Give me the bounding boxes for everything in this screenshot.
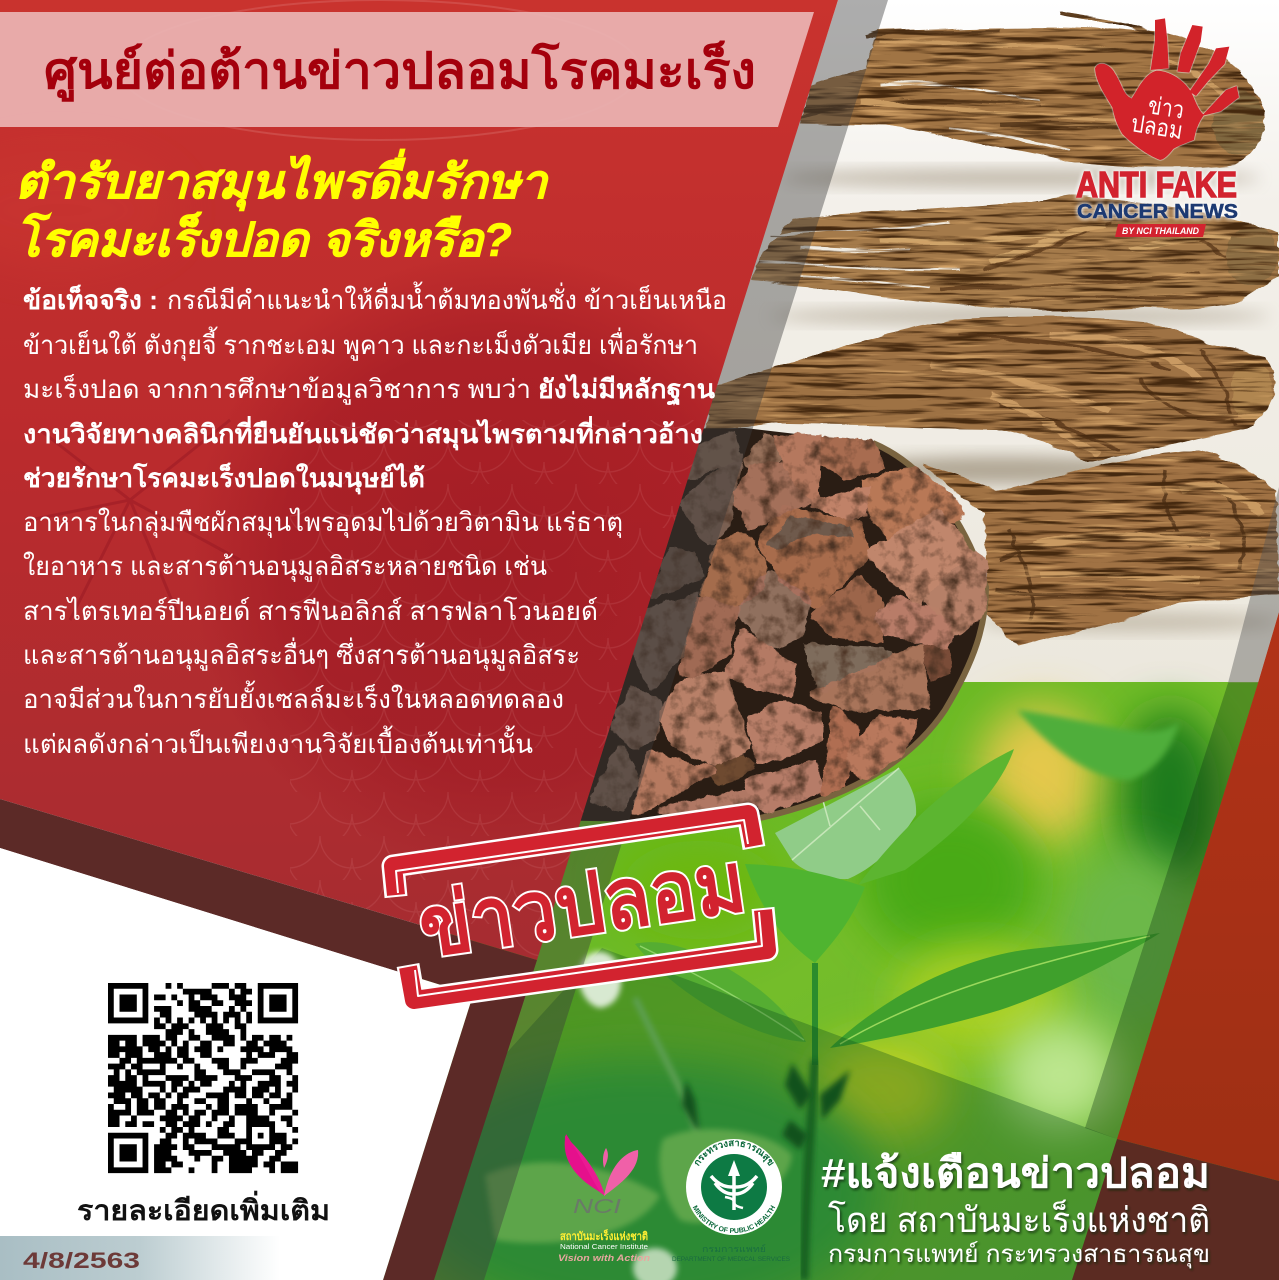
logo: ministry of public health	[672, 1139, 791, 1263]
photo: basket of bark pieces	[540, 428, 986, 822]
lower leaf blur	[659, 1129, 792, 1223]
right translucent strip	[1085, 683, 1258, 1139]
headline question	[15, 148, 550, 266]
NCI motto: Vision with Action	[558, 1253, 651, 1263]
wordmark: ANTI FAKE	[1076, 164, 1237, 205]
body text: สารไตรเทอร์ปีนอยด์ สารฟีนอลิกส์ สารฟลาโวนอยด์	[23, 596, 598, 626]
stamp text: ข่าวปลอม	[413, 834, 751, 975]
maroon diagonal	[0, 799, 537, 1280]
hashtag footer: #แจ้งเตือนข่าวปลอม	[821, 1150, 1210, 1196]
wordmark	[1076, 164, 1238, 223]
NCI thai name: สถาบันมะเร็งแห่งชาติ	[560, 1229, 648, 1243]
logo: national cancer institute	[558, 1134, 651, 1263]
hashtag footer: โดย สถาบันมะเร็งแห่งชาติ	[828, 1199, 1210, 1240]
department thai: กรมการแพทย์	[702, 1243, 766, 1254]
title: ศูนย์ต่อต้านข่าวปลอมโรคมะเร็ง	[44, 40, 756, 102]
date band: 4/8/2563	[23, 1248, 140, 1273]
qr caption: รายละเอียดเพิ่มเติม	[77, 1190, 330, 1226]
badge	[1115, 224, 1206, 237]
icon: pink heart	[565, 1134, 638, 1196]
icon: red hand	[1095, 18, 1239, 160]
body text: อาหารในกลุ่มพืชผักสมุนไพรอุดมไปด้วยวิตามิน แร่ธาตุ	[23, 507, 623, 538]
body text: และสารต้านอนุมูลอิสระอื่นๆ ซึ่งสารต้านอนุมูลอิสระ	[23, 637, 580, 671]
body text: ใยอาหาร และสารต้านอนุมูลอิสระหลายชนิด เช่น	[23, 551, 547, 582]
NCI english name: National Cancer Institute	[560, 1242, 648, 1251]
white lower-left panel	[0, 848, 473, 1280]
stems	[812, 963, 818, 1065]
body text: กรณีมีคำแนะนำให้ดื่มน้ำต้มทองพันชั่ง ข้าวเย็นเหนือ	[167, 281, 727, 315]
body text: ข้อเท็จจริง :	[23, 284, 158, 315]
NCI mark: NCI	[573, 1196, 622, 1218]
body text: อาจมีส่วนในการยับยั้งเซลล์มะเร็งในหลอดทดลอง	[23, 680, 564, 714]
translucent grey band	[434, 0, 888, 1280]
root 4	[921, 451, 1279, 647]
small dark buds	[682, 1063, 850, 1150]
department english: DEPARTMENT OF MEDICAL SERVICES	[672, 1256, 791, 1263]
headline question: ตำรับยาสมุนไพรดื่มรักษา	[15, 148, 550, 211]
badge: BY NCI THAILAND	[1122, 226, 1199, 236]
central leaf	[745, 864, 865, 963]
wordmark: CANCER NEWS	[1077, 201, 1238, 223]
root 3	[707, 317, 1275, 462]
root 1	[800, 13, 1265, 168]
body text: ข้าวเย็นใต้ ตังกุยจี้ รากชะเอม พูคาว และกะเม็งตัวเมีย เพื่อรักษา	[23, 326, 698, 361]
root 2	[752, 196, 1279, 310]
hand caption	[1129, 92, 1186, 145]
logo: anti fake cancer news	[1076, 18, 1239, 237]
hashtag footer: กรมการแพทย์ กระทรวงสาธารณสุข	[828, 1240, 1210, 1269]
logo: ministry of public health: MINISTRY OF PUBLIC HEALTH	[692, 1205, 776, 1234]
body text: งานวิจัยทางคลินิกที่ยืนยันแน่ชัดว่าสมุนไพรตามที่กล่าวอ้าง	[23, 415, 703, 451]
hand caption: ปลอม	[1129, 110, 1185, 145]
right long leaf	[830, 933, 1160, 1048]
photo: dried herb roots	[640, 0, 1279, 684]
right red stripe	[1117, 612, 1279, 1181]
dark overlay on lower part	[300, 948, 1279, 1280]
headline question: โรคมะเร็งปอด จริงหรือ?	[15, 211, 512, 266]
stamp: fake news	[393, 814, 767, 1000]
logo: ministry of public health: กระทรวงสาธารณสุข	[694, 1140, 774, 1166]
panel: red background	[0, 0, 840, 960]
upper-right grey strip	[1228, 487, 1279, 683]
body text: ช่วยรักษาโรคมะเร็งปอดในมนุษย์ได้	[23, 462, 425, 495]
hashtag footer	[821, 1150, 1210, 1269]
body text: แต่ผลดังกล่าวเป็นเพียงงานวิจัยเบื้องต้นเท่านั้น	[23, 725, 533, 759]
hand caption: ข่าว	[1146, 92, 1186, 125]
body text: มะเร็งปอด จากการศึกษาข้อมูลวิชาการ พบว่า	[23, 373, 531, 405]
qr code	[108, 983, 298, 1173]
pale leaf	[775, 768, 916, 879]
header band	[0, 12, 814, 127]
date band	[0, 1236, 280, 1280]
icon: caduceus	[711, 1160, 757, 1210]
left leaf	[635, 942, 806, 1042]
photo: green leaves	[300, 682, 1279, 1280]
body text: ยังไม่มีหลักฐาน	[538, 373, 715, 407]
narrow leaf	[858, 749, 1014, 885]
white flower	[579, 952, 621, 1008]
bottom-right maroon corner	[1072, 1139, 1279, 1280]
body text	[23, 281, 727, 759]
stamp brackets	[393, 814, 767, 1000]
